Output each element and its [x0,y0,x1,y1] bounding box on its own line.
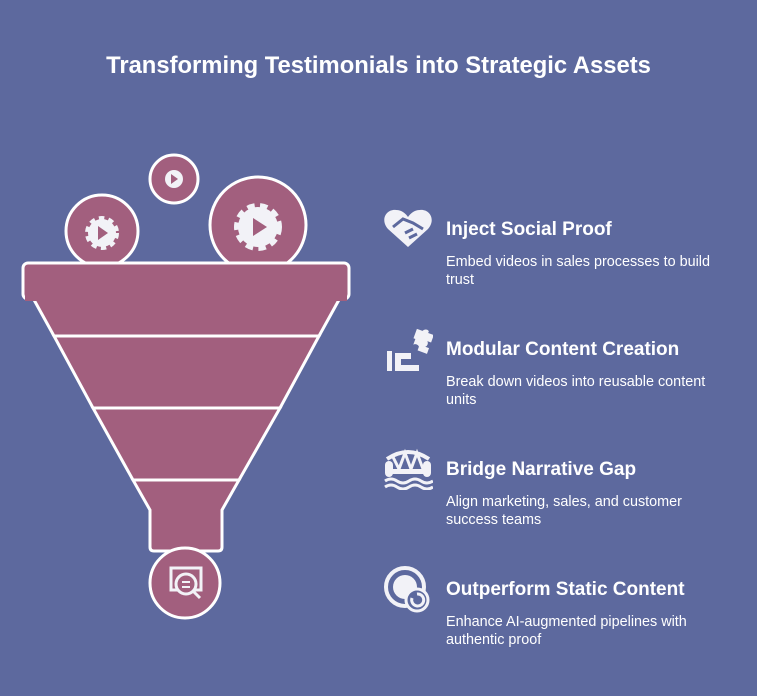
item: Inject Social Proof [446,219,710,288]
icon: refresh circle [384,566,430,612]
circle: small gear [150,155,198,203]
item: Outperform Static Content [446,579,687,648]
item: Bridge Narrative Gap [446,459,682,528]
circle: left gear [66,195,138,267]
item: Modular Content Creation: Modular Content Creation [446,339,679,360]
item: Bridge Narrative Gap: Bridge Narrative Gap [446,459,636,480]
item: Outperform Static Content: Enhance AI-augmented pipelines with authentic proof [446,614,687,648]
item: Inject Social Proof: Inject Social Proof [446,219,612,240]
item: Inject Social Proof: Embed videos in sales processes to build trust [446,254,710,288]
bottom circle: search icon [150,548,220,618]
icon: hand puzzle [387,328,433,371]
item: Bridge Narrative Gap: Align marketing, sales, and customer success teams [446,494,682,528]
item: Outperform Static Content: Outperform Static Content [446,579,685,600]
title: Transforming Testimonials into Strategic Assets [106,52,651,79]
funnel graphic [22,154,350,620]
funnel body [23,263,349,551]
icon: heart handshake [384,210,432,247]
icon: bridge [384,449,433,490]
item: Modular Content Creation [446,339,706,408]
circle: right gear [210,177,306,273]
item: Modular Content Creation: Break down videos into reusable content units [446,374,705,408]
